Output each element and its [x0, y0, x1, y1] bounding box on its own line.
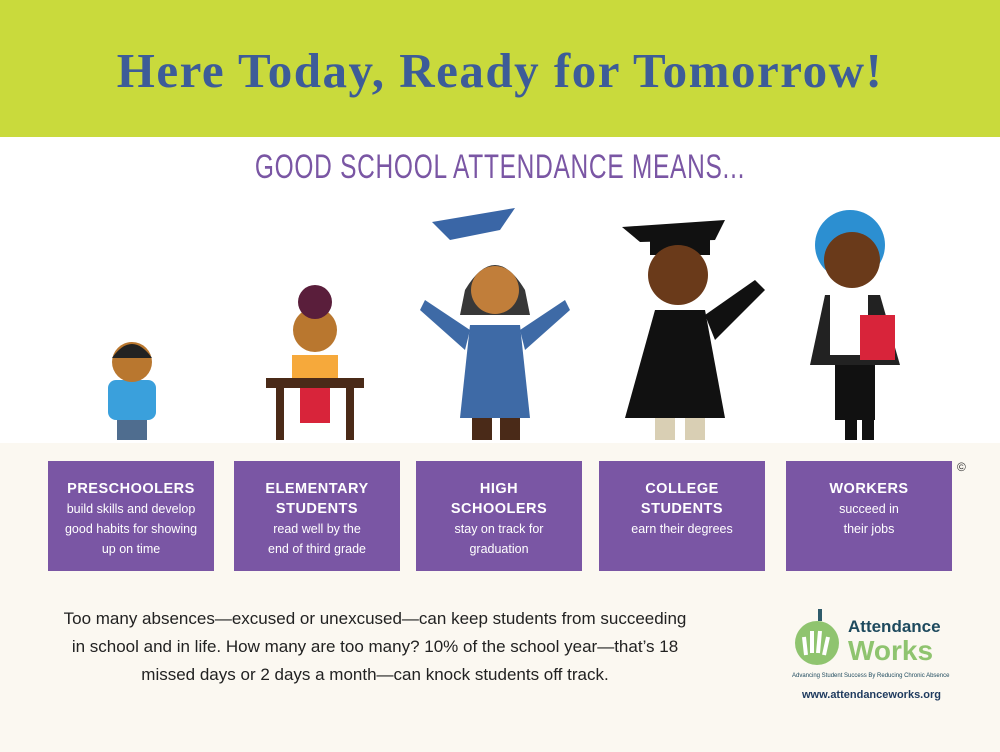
- illustration: five figures: [108, 208, 900, 440]
- bottom text: Too many absences—excused or unexcused—can keep students from succeeding: [64, 609, 686, 628]
- figure: high schooler: [420, 208, 570, 440]
- box: workers: succeed in: [839, 502, 899, 516]
- logo: Attendance Works: [792, 609, 950, 701]
- bottom text: in school and in life. How many are too many? 10% of the school year—that’s 18: [72, 637, 678, 656]
- box: preschoolers: PRESCHOOLERS: [67, 481, 195, 497]
- box: elementary: ELEMENTARY STUDENTS: [265, 481, 369, 517]
- bottom text: missed days or 2 days a month—can knock students off track.: [141, 665, 609, 684]
- box: workers: their jobs: [844, 522, 894, 536]
- box: high schoolers: HIGH: [480, 481, 518, 497]
- box: preschoolers: up on time: [102, 542, 160, 556]
- figure: college student: [622, 220, 765, 440]
- box: college: earn their degrees: [631, 522, 733, 536]
- box: elementary: [234, 461, 400, 571]
- box: high schoolers: [416, 461, 582, 571]
- icon: apple: [795, 609, 839, 665]
- box: college: STUDENTS: [641, 501, 723, 517]
- box: high schoolers: graduation: [469, 542, 529, 556]
- box: high schoolers: SCHOOLERS: [451, 501, 547, 517]
- box: preschoolers: [48, 461, 214, 571]
- subtitle: GOOD SCHOOL ATTENDANCE MEANS...: [255, 148, 745, 186]
- box: college: [599, 461, 765, 571]
- logo: Attendance Works: Advancing Student Success By Reducing Chronic Absence: [792, 673, 949, 679]
- box: workers: [786, 461, 952, 571]
- copyright: ©: [957, 460, 966, 474]
- figure: worker: [810, 210, 900, 440]
- box: high schoolers: stay on track for: [455, 522, 543, 536]
- figure: preschooler: [108, 342, 156, 440]
- bottom text: [64, 609, 686, 684]
- logo: Attendance Works: www.attendanceworks.org: [802, 689, 941, 701]
- box: preschoolers: good habits for showing: [65, 522, 197, 536]
- box: elementary: read well by the: [273, 522, 361, 536]
- title: Here Today, Ready for Tomorrow!: [117, 43, 883, 98]
- figure: elementary student: [266, 285, 364, 440]
- title banner: [0, 0, 1000, 137]
- box: preschoolers: build skills and develop: [67, 502, 195, 516]
- box: workers: WORKERS: [829, 481, 909, 497]
- box: elementary: end of third grade: [268, 542, 366, 556]
- box: college: COLLEGE: [645, 481, 719, 497]
- white figures area: [0, 137, 1000, 443]
- logo text: Attendance: [848, 617, 941, 636]
- logo: Attendance Works: Works: [848, 635, 933, 666]
